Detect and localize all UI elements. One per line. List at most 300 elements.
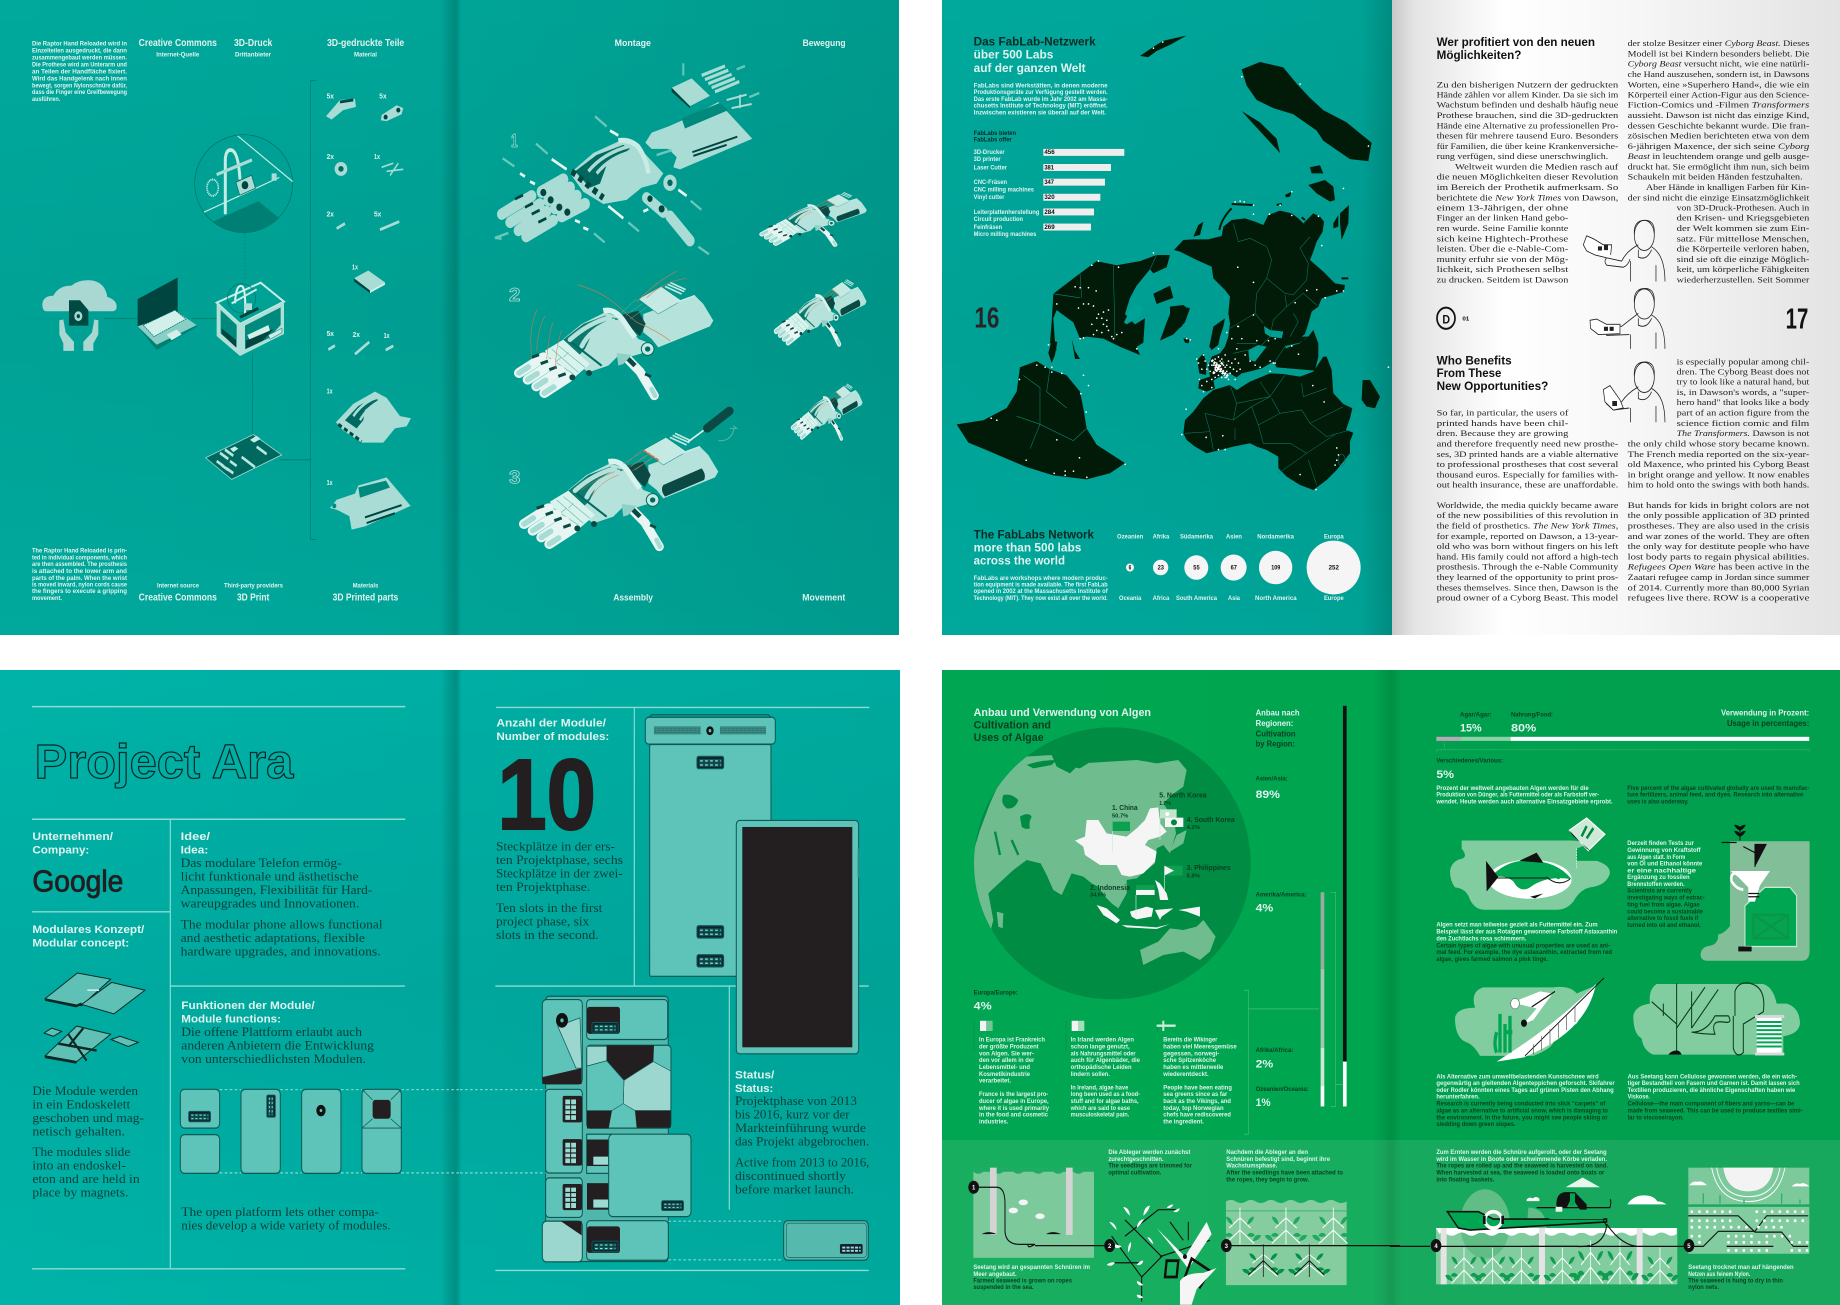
Europe text columns: today, top Norwegian <box>1163 1106 1224 1112</box>
heading German <box>1437 36 1595 62</box>
step 5 caption: Netzen aus feinem Nylon. <box>1688 1271 1751 1278</box>
Europe text columns <box>974 990 1237 1126</box>
article English right column: science fiction comic and film <box>1677 418 1810 428</box>
article English left column: ses, 3D printed hands are a viable alternative <box>1437 449 1619 459</box>
bar chart: FabLab equipment: CNC milling machines <box>974 187 1034 194</box>
title German: auf der ganzen Welt <box>974 62 1086 75</box>
region bar chart: Afrika/Africa: <box>1256 1047 1293 1054</box>
idea block: wareupgrades und Innovationen. <box>181 897 360 911</box>
column headings English: Third-party providers <box>224 583 283 590</box>
status text: Status/ <box>735 1070 775 1082</box>
modular concept block: Modulares Konzept/ <box>32 924 145 936</box>
bar chart: FabLab equipment: Circuit production <box>974 217 1024 223</box>
map country borders <box>1017 255 1157 449</box>
column headings German: 3D-gedruckte Teile <box>327 37 404 48</box>
illustration: salmon <box>1450 818 1610 910</box>
article English left column: theses themselves. Since then, Dawson is the <box>1437 583 1619 593</box>
article German right column: der sind nicht die einzige Einsatzmöglichkeit <box>1628 193 1810 203</box>
title German: über 500 Labs <box>974 49 1053 62</box>
heading English: From These <box>1437 367 1501 380</box>
region bar chart: by Region: <box>1256 739 1295 749</box>
Europe text columns: als Nahrungsmittel oder <box>1071 1051 1136 1058</box>
open platform text <box>181 1206 391 1233</box>
usage percentage bar: Usage in percentages: <box>1727 719 1809 728</box>
title: Cultivation and <box>974 720 1051 732</box>
intro text German <box>974 83 1108 117</box>
article German left column: die neuen Möglichkeiten dieser Revolution <box>1437 172 1618 182</box>
globe map <box>970 727 1251 999</box>
idea block: Das modulare Telefon ermög- <box>181 857 342 870</box>
illustration: fuel canister <box>1701 825 1810 961</box>
heading German: Möglichkeiten? <box>1437 49 1521 62</box>
article English left column: thousand euros. Especially for families with- <box>1437 470 1619 480</box>
step 4 caption: When harvested at sea, the seaweed is loaded onto boats or <box>1436 1170 1605 1177</box>
textile caption: Cellulose—the main component of fibers and yarns—can be <box>1628 1101 1794 1108</box>
article German right column: che Hand auszusehen, sondern ist, in Dawsons <box>1628 69 1809 79</box>
title English: more than 500 labs <box>974 542 1081 555</box>
idea block: Idee/ <box>181 831 210 843</box>
movement hand 2 <box>776 280 867 344</box>
open platform text: The open platform lets other compa- <box>181 1206 379 1219</box>
fuel text: Scientists are currently <box>1627 888 1693 895</box>
icon: exploded phone <box>44 973 145 1062</box>
intro text German: Einzelteilen ausgedruckt, die dann <box>32 48 128 55</box>
article German right column: Beast in leuchtendem orange und gelb ausge- <box>1628 151 1810 161</box>
Europe text columns: People have been eating <box>1163 1085 1233 1092</box>
article English right column: refugees live there. ROW is a cooperative <box>1628 593 1810 603</box>
Europe text columns: In Ireland, algae have <box>1071 1085 1128 1092</box>
bubble chart: labs per continent: Nordamerika <box>1257 534 1295 541</box>
article English right column: The Transformers. Dawson is not <box>1677 428 1810 438</box>
step 1 illustration <box>968 1167 1094 1258</box>
modules text <box>32 1085 144 1200</box>
parts list: 1x <box>352 264 358 271</box>
article English right column: part of an action figure from the <box>1677 408 1810 418</box>
company block: Company: <box>32 845 89 857</box>
skier caption: the environment. In the future, you might see people skiing or <box>1436 1115 1609 1122</box>
Europe text columns: In Europa ist Frankreich <box>979 1037 1046 1044</box>
article German left column: Hände eine Alternative zu professionellen Pro- <box>1437 121 1619 131</box>
step 5 caption: Seetang trocknet man auf hängenden <box>1688 1264 1794 1271</box>
bubble chart: labs per continent: Europa <box>1324 534 1345 541</box>
Europe text columns: the ingredient. <box>1163 1119 1204 1126</box>
bubble chart: labs per continent: Südamerika <box>1180 534 1214 541</box>
step 3 illustration: growing sprouts <box>1219 1200 1400 1285</box>
phone back with slots <box>645 715 775 976</box>
article English right column: and war zones of the world. They are often <box>1628 531 1809 541</box>
intro text German: FabLabs sind Werkstätten, in denen moderne <box>974 83 1108 90</box>
company block <box>32 831 123 898</box>
panel: Project Ara spread <box>0 670 900 1305</box>
panel: algae cultivation spread <box>942 670 1840 1305</box>
various text: Five percent of the algae cultivated globally are used to manufac- <box>1627 785 1809 792</box>
bar chart: FabLab equipment: 381 <box>1044 165 1054 172</box>
number of modules: slots in the second. <box>496 929 599 942</box>
article German right column: dessen Geschichte bekannt wurde. Die fran- <box>1628 121 1810 131</box>
Europe text columns: auch für Algenbäder, die <box>1071 1058 1140 1064</box>
country labels: 5.8% <box>1187 873 1200 880</box>
Europe text columns: Lebensmittel- und <box>979 1065 1031 1071</box>
module functions text: Module functions: <box>181 1014 281 1026</box>
bar chart: FabLab equipment: Laser Cutter <box>974 165 1008 172</box>
connector lines <box>104 80 317 539</box>
number of modules: Ten slots in the first <box>496 902 603 915</box>
Europe text columns: in the food and cosmetic <box>979 1112 1048 1119</box>
module cards <box>180 1089 401 1173</box>
bubble chart: labs per continent: 55 <box>1193 565 1200 572</box>
article German left column: rung verfügen, sind diese unerschwinglich. <box>1437 151 1608 161</box>
region bar chart: Cultivation <box>1256 729 1296 739</box>
module functions text: Die offene Plattform erlaubt auch <box>181 1026 362 1039</box>
region bar chart: 1% <box>1256 1097 1271 1109</box>
article German right column: wiederherzustellen. Seit Sommer <box>1677 275 1810 285</box>
skier caption: gegenwärtig an gleitenden Algenteppichen geforscht. Skifahrer <box>1436 1081 1616 1087</box>
Europe text columns: musculoskeletal pain. <box>1071 1112 1130 1119</box>
article German left column: berichtete die New York Times von Dawson, <box>1437 193 1618 203</box>
step 5 caption: nylon nets. <box>1688 1285 1719 1291</box>
intro text English: are then assembled. The prosthesis <box>32 562 127 568</box>
page number 17: 17 <box>1786 302 1808 335</box>
salmon caption: Algen setzt man teilweise gezielt als Futtermittel ein. Zum <box>1436 922 1598 929</box>
article English right column <box>1626 357 1810 603</box>
step 2: hand with cords <box>519 282 713 396</box>
article English left column: of the new possibilities of this revolution in <box>1437 510 1618 520</box>
column headings German: Material <box>354 52 377 58</box>
intro text German: zusammengebaut werden müssen. <box>32 55 127 62</box>
illustration: boy with prosthesis 1 <box>1583 220 1665 282</box>
bubble chart: labs per continent: 23 <box>1158 565 1164 572</box>
article German left column: im Bereich der Prothetik aufmerksam. So <box>1437 182 1618 192</box>
step 4 caption: Zum Ernten werden die Schnüre aufgerollt, oder der Seetang <box>1436 1150 1607 1156</box>
bubble chart: labs per continent: Europe <box>1324 596 1344 602</box>
grid rules <box>32 707 405 1269</box>
region bar chart: Anbau nach <box>1256 708 1300 718</box>
bar chart: FabLab equipment <box>974 131 1124 238</box>
right page: assembly and movement <box>495 38 846 603</box>
article German left column: einem 13-Jährigen, der ohne <box>1437 203 1569 213</box>
step 4 caption <box>1435 1150 1608 1184</box>
intro text German: an Teilen der Handfläche fixiert. <box>32 69 127 76</box>
title: Anbau und Verwendung von Algen <box>974 707 1151 719</box>
number of modules: Anzahl der Module/ <box>496 718 606 730</box>
illustration: boy with prosthesis 3 <box>1603 362 1665 422</box>
region bar chart: 2% <box>1256 1059 1273 1071</box>
grid rules <box>495 707 869 1270</box>
modules text: Die Module werden <box>32 1085 138 1098</box>
article German right column: der Welt kommen sie zum Ein- <box>1677 223 1810 233</box>
fuel text: alternative to fossil fuels if <box>1627 916 1698 922</box>
article English left column: out health insurance, these are unaffordable. <box>1437 480 1618 490</box>
article English right column: dren. The Cyborg Beast does not <box>1677 367 1810 377</box>
bar chart: FabLab equipment: FabLabs offer <box>974 137 1013 144</box>
title: Project Ara: Project Ara <box>35 735 294 789</box>
step 2 caption: zurechtgeschnitten. <box>1108 1157 1164 1163</box>
title: Uses of Algae <box>974 732 1044 744</box>
company block: Unternehmen/ <box>32 831 113 843</box>
Europe text columns: sea greens since as far <box>1163 1092 1228 1098</box>
number of modules: ten Projektphase, sechs <box>496 854 623 867</box>
article English right column: Zaatari refugee camp in Jordan since summer <box>1628 572 1810 582</box>
region bar chart: Amerika/America: <box>1256 892 1307 899</box>
step numbers: 3 <box>509 466 520 488</box>
endoskeleton with modules <box>542 996 691 1262</box>
illustration: boy with prosthesis 2 <box>1590 288 1665 349</box>
icon: cloud with file and hands <box>42 280 117 351</box>
bar chart: FabLab equipment: Feinfräsen <box>974 225 1003 231</box>
page mark D 01: D <box>1442 314 1450 327</box>
bubble chart: labs per continent: Ozeanien <box>1117 534 1144 541</box>
column headings German: Creative Commons <box>139 37 217 48</box>
status text: discontinued shortly <box>735 1170 846 1183</box>
article English right column: try to look like a natural hand, but <box>1677 377 1810 387</box>
Europe text columns: where it is used primarily <box>978 1106 1050 1112</box>
article English right column: hero hand" that looks like a body <box>1677 397 1809 407</box>
fuel text: von Öl und Ethanol könnte <box>1627 860 1702 868</box>
page mark D 01: 01 <box>1462 316 1469 322</box>
headings <box>613 38 846 603</box>
step 1: exploded hand <box>495 63 759 254</box>
article German right column: Worten, eine »Superhero Hand«, die wie ein <box>1628 80 1809 90</box>
bubble chart: labs per continent: Afrika <box>1153 534 1170 541</box>
step 2 caption: optimal cultivation. <box>1108 1170 1162 1177</box>
article English right column: the only child whose story became known. <box>1628 439 1809 449</box>
intro text English: Technology (MIT). They now exist all over the world. <box>974 596 1108 602</box>
article English right column: But hands for kids in bright colors are not <box>1628 500 1810 510</box>
status text: Projektphase von 2013 <box>735 1095 857 1109</box>
article English left column: hand. His family could not afford a high-tech <box>1437 552 1618 562</box>
bubble chart: labs per continent: Oceania <box>1119 596 1142 602</box>
intro text English: tion equipment is made available. The first FabLab <box>974 582 1108 588</box>
article English right column: in bright orange and yellow. It now enables <box>1628 470 1809 480</box>
dashed connectors <box>460 1090 783 1260</box>
skier caption: sledding down green slopes. <box>1436 1122 1516 1128</box>
article English right column: the only possible application of 3D printed <box>1628 510 1809 520</box>
bar chart: FabLab equipment: Vinyl cutter <box>974 195 1005 201</box>
step 3 caption: Wachstumsphase. <box>1226 1163 1278 1170</box>
article German right column: den Krisen- und Kriegsgebieten <box>1677 213 1809 223</box>
step 1 caption: Farmed seaweed is grown on ropes <box>973 1278 1072 1284</box>
left page: algae regions <box>968 706 1400 1305</box>
Europe text columns: long been used as a food- <box>1071 1092 1140 1098</box>
article English left column: proud owner of a Cyborg Beast. This model <box>1437 593 1619 603</box>
intro text German: ausführen. <box>32 97 61 103</box>
article German right column: der stolze Besitzer einer Cyborg Beast. Dieses <box>1628 38 1809 48</box>
illustration: skier on algae slope <box>1455 978 1604 1062</box>
fuel text: Gewinnung von Kraftstoff <box>1627 847 1701 854</box>
heading English: New Opportunities? <box>1437 380 1548 393</box>
right page: Project Ara hardware <box>460 707 870 1270</box>
left page: Project Ara text <box>32 707 460 1269</box>
article English right column: of 2014. Currently more than 80,000 Syrian <box>1628 583 1809 593</box>
page number 16: 16 <box>974 301 999 334</box>
textile caption: tiger Bestandteil von Fasern und Garnen ist. Damit lassen sich <box>1628 1081 1800 1087</box>
phone front with screen <box>736 820 860 1054</box>
step 4 caption: into floating baskets. <box>1436 1177 1495 1184</box>
region bar chart: Ozeanien/Oceania: <box>1256 1087 1309 1093</box>
status text: bis 2016, kurz vor der <box>735 1109 850 1122</box>
Europe text columns: sche Spitzenköche <box>1163 1058 1216 1064</box>
article German left column: Hände zählen vor allem Kinder. Da sie sich im <box>1437 90 1619 100</box>
Europe text columns: Kosmetikindustrie <box>979 1071 1030 1078</box>
intro text German: Wird das Handgelenk nach innen <box>32 76 128 83</box>
step 3 illustration: growing sprouts: 3 <box>1225 1244 1228 1250</box>
region bar chart: 4% <box>1256 903 1273 915</box>
idea block <box>181 831 383 959</box>
intro text German: bewegt, sorgen Nylonschnüre dafür, <box>32 83 127 90</box>
article German left column: Weltweit wurden die Medien rasch auf <box>1455 162 1619 172</box>
icon: laptop <box>138 277 197 350</box>
step 5 caption: The seaweed is hung to dry in thin <box>1688 1278 1784 1284</box>
step 3 caption <box>1226 1150 1344 1184</box>
column headings English: 3D Print <box>237 592 269 603</box>
column headings English: Internet source <box>157 583 199 590</box>
intro text English: ted in individual components, which <box>32 555 128 562</box>
modules text: netisch gehalten. <box>32 1126 125 1139</box>
fuel text <box>1627 841 1705 929</box>
Europe text columns: orthopädische Leiden <box>1071 1065 1132 1071</box>
idea block: The modular phone allows functional <box>181 919 383 932</box>
bar chart: FabLab equipment: 269 <box>1044 225 1055 231</box>
module functions text: von unterschiedlichsten Modulen. <box>181 1053 366 1066</box>
article German left column: munity erfuhr sie von der Mög- <box>1437 254 1569 264</box>
various text: wendet. Heute werden auch alternative Einsatzgebiete erprobt. <box>1435 799 1613 806</box>
country labels: 1.7% <box>1159 801 1171 807</box>
Europe text columns: der größte Produzent <box>979 1044 1039 1051</box>
Europe text columns: industries. <box>979 1119 1009 1126</box>
status text: before market launch. <box>735 1184 854 1197</box>
idea block: and aesthetic adaptations, flexible <box>181 932 365 945</box>
article German right column: aussieht. Dawson ist nicht das einzige Kind, <box>1628 110 1809 120</box>
article English left column: printed hands have been chil- <box>1437 418 1569 428</box>
country labels: 34.6% <box>1090 892 1106 899</box>
Europe text columns: Europa/Europe: <box>974 990 1018 996</box>
textile caption: Viskose. <box>1628 1094 1650 1101</box>
article German right column <box>1628 38 1810 285</box>
bubble chart: labs per continent: South America <box>1176 596 1218 602</box>
intro text German: Die Raptor Hand Reloaded wird in <box>32 41 128 48</box>
article German right column: satz. Für mittellose Menschen, <box>1677 234 1809 244</box>
Europe text columns: lindern sollen. <box>1071 1071 1110 1078</box>
country labels: 4.2% <box>1187 825 1200 831</box>
article English left column: for example, reported on Dawson, a 13-year- <box>1437 531 1619 541</box>
usage percentage bar <box>1436 708 1809 781</box>
bubble chart: labs per continent: 67 <box>1231 565 1237 572</box>
bar chart: FabLab equipment: 284 <box>1044 209 1056 216</box>
article German right column: von 3D-Druck-Prothesen. Auch in <box>1677 203 1809 213</box>
country labels <box>1090 792 1235 899</box>
bar chart: FabLab equipment: 3D printer <box>974 157 1001 163</box>
skier caption: herunterfahren. <box>1436 1094 1480 1101</box>
Europe text columns: von Algen. Sie wer- <box>979 1051 1034 1058</box>
headings: Movement <box>802 593 846 603</box>
article English right column: prostheses. They are also used in the crisis <box>1628 521 1809 531</box>
various text: ture fertilizers, animal feed, and dyes. Research into alternative <box>1627 792 1803 799</box>
title English <box>974 529 1095 568</box>
bubble chart: labs per continent <box>1117 534 1361 602</box>
modules text: in ein Endoskelett <box>32 1099 131 1112</box>
article German right column: Körperteil einer Action-Figur aus den Science- <box>1628 90 1810 100</box>
bar chart: FabLab equipment: 456 <box>1044 150 1055 156</box>
salmon caption: mal feed. For example, the dye astaxanthin, extracted from red <box>1436 949 1613 956</box>
movement hand 1 <box>762 192 867 245</box>
Europe text columns: schon lange genutzt, <box>1071 1044 1130 1051</box>
Europe text columns: haben viel Meeresgemüse <box>1163 1044 1237 1051</box>
step 5 illustration: drying nets <box>1684 1168 1809 1254</box>
article German right column: sind sie oft die einzige Möglich- <box>1677 254 1810 264</box>
article German right column: druckt hat. Sie ermöglicht ihm nun, sich beim <box>1628 162 1810 172</box>
article German left column: Wachstum befinden und deshalb häufig neue <box>1437 100 1619 110</box>
illustration: algae textile spool <box>1633 983 1800 1055</box>
usage percentage bar: 80% <box>1511 723 1536 735</box>
number of modules: ten Projektphase. <box>496 881 591 894</box>
bubble chart: labs per continent: 252 <box>1329 565 1339 572</box>
idea block: licht funktionale und ästhetische <box>181 871 359 884</box>
idea block: Idea: <box>181 845 208 857</box>
parts list: 5x <box>379 93 387 101</box>
page: article text <box>1437 36 1810 603</box>
article German left column: Prothese brauchen, sind die 3D-gedruckten <box>1437 110 1618 120</box>
headings: Montage <box>615 38 651 48</box>
title <box>974 707 1151 744</box>
icon: printer nozzle detail circle <box>195 135 293 233</box>
usage percentage bar: 15% <box>1460 723 1482 735</box>
intro text English: movement. <box>32 596 62 602</box>
salmon caption: Certain types of algae with unusual properties are used as ani- <box>1436 943 1610 950</box>
status text <box>735 1070 870 1197</box>
parts list: 2x <box>327 211 334 219</box>
parts list: 1x <box>327 480 333 487</box>
various text: Produktion von Dünger, als Futtermittel oder als Farbstoff ver- <box>1436 792 1599 799</box>
step 4 illustration: harvest boat: 4 <box>1434 1244 1439 1250</box>
step numbers: 1 <box>511 129 518 151</box>
usage percentage bar: 5% <box>1436 769 1454 781</box>
article English left column: to professional prostheses that cost several <box>1437 459 1619 469</box>
step 1 caption: Seetang wird an gespannten Schnüren im <box>973 1264 1090 1271</box>
step 4 caption: wird im Wasser in Boote oder schwimmende Körbe verladen. <box>1435 1157 1607 1163</box>
idea block: hardware upgrades, and innovations. <box>181 946 381 959</box>
column headings German: 3D-Druck <box>234 37 272 48</box>
Europe text columns: stuff and for algae baths, <box>1071 1099 1139 1105</box>
open platform text: nies develop a wide variety of modules. <box>181 1220 391 1233</box>
step 3 caption: Nachdem die Ableger an den <box>1226 1150 1309 1156</box>
article German right column: die Körperteile verloren haben, <box>1677 244 1809 254</box>
step 3: assembled hand with screwdriver <box>524 411 737 547</box>
Europe text columns: which are said to ease <box>1070 1106 1130 1112</box>
skier caption <box>1436 1074 1616 1128</box>
article English left column: they learned of the opportunity to print pros- <box>1437 572 1619 582</box>
fuel text: could become a sustainable <box>1627 909 1703 916</box>
parts list: 5x <box>327 93 334 101</box>
article German left column: sich keine Hightech-Prothese <box>1437 234 1569 244</box>
number of modules: Number of modules: <box>496 731 609 743</box>
bubble chart: labs per continent: Asia <box>1228 596 1241 602</box>
column headings English <box>139 583 398 603</box>
status text: Status: <box>735 1083 773 1095</box>
article German left column: Zu den bisherigen Nutzern der gedruckten <box>1437 80 1618 90</box>
region bar chart: 89% <box>1256 789 1280 801</box>
number of modules: project phase, six <box>496 915 590 929</box>
article English left column: and therefore frequently need new prosthe- <box>1437 439 1619 449</box>
fuel text: aus Algen statt. In Form <box>1627 854 1685 861</box>
Europe text columns: verarbeitet. <box>979 1078 1011 1085</box>
column headings German <box>139 37 404 58</box>
bubble chart: labs per continent: 109 <box>1271 565 1280 572</box>
intro text German: chusetts Institute of Technology (MIT) eröffnet. <box>974 103 1108 110</box>
region bar chart: Asien/Asia: <box>1256 776 1288 783</box>
intro text German: dass die Finger eine Greifbewegung <box>32 90 128 96</box>
skier caption: oder Rodler könnten eines Tages auf grünen Pisten den Abhang <box>1436 1088 1614 1094</box>
step 1 illustration: 1 <box>972 1185 975 1192</box>
